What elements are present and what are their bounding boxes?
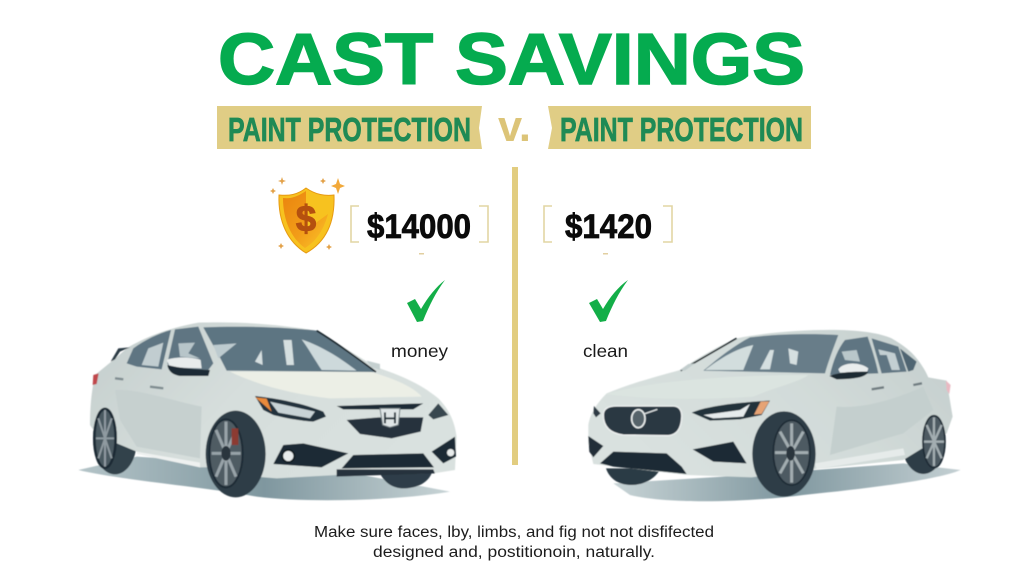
door handles (872, 383, 922, 389)
mirror base (829, 372, 868, 379)
car: left silver sedan (78, 322, 457, 500)
fog vent (273, 443, 348, 467)
rear wheel rim (94, 409, 116, 468)
icon: gold dollar shield: $ (296, 198, 316, 239)
front far tire (606, 468, 661, 485)
badge glyph (385, 412, 395, 423)
front window reflection (178, 343, 200, 358)
mirror (838, 363, 868, 373)
front spokes (212, 422, 241, 485)
mirror base (167, 365, 210, 376)
windshield pillars (255, 340, 294, 365)
icon: gold dollar shield (270, 177, 345, 253)
left headlight (593, 406, 601, 417)
banner: left paint protection (217, 106, 482, 149)
versus label: v. (498, 102, 531, 151)
lower grille (600, 452, 687, 474)
sill (815, 448, 905, 469)
mirror (167, 357, 202, 368)
center divider (512, 167, 518, 465)
fog lamp (282, 450, 294, 462)
windshield reflection right (302, 339, 357, 371)
front hub (786, 446, 795, 461)
car: right silver sedan (588, 330, 961, 501)
rear side window (872, 338, 907, 373)
lower vent (693, 442, 747, 463)
window reflection (842, 350, 860, 362)
banner: right paint protection (548, 106, 811, 149)
headlight amber (241, 397, 272, 423)
spoiler (111, 347, 130, 362)
footer caption: Make sure faces, lby, limbs, and fig not not disfifected (314, 524, 714, 541)
left vent (588, 436, 603, 457)
side sill (137, 452, 200, 467)
hood crease (337, 403, 423, 409)
grille emblem (632, 410, 645, 428)
quarter window (900, 348, 917, 372)
price: left (351, 206, 488, 254)
brake caliper (232, 428, 238, 445)
rear spokes (924, 417, 944, 466)
rear window reflection (142, 343, 163, 367)
windshield lower edge (317, 331, 376, 372)
upper grille (347, 417, 423, 438)
front far tire (380, 473, 432, 488)
windshield reflection left (213, 343, 237, 358)
headlight (692, 401, 770, 421)
windshield (703, 334, 838, 373)
rear tire (93, 409, 137, 474)
windshield (203, 327, 376, 372)
hub (221, 446, 231, 461)
windshield edge (681, 338, 737, 371)
front rim (209, 419, 243, 487)
ground shadow (613, 463, 961, 501)
rear tire (902, 409, 945, 474)
headlight amber (754, 401, 776, 446)
front side window (830, 337, 878, 375)
title: CAST SAVINGS (218, 20, 805, 100)
taillight (946, 381, 951, 394)
windshield reflection (705, 345, 753, 370)
windshield pillars (760, 348, 798, 369)
body shell (90, 322, 457, 478)
ground shadow (78, 457, 450, 500)
right fog vent (432, 437, 456, 463)
rear side window (127, 330, 171, 369)
footer caption (314, 524, 714, 561)
banner: left paint protection: PAINT PROTECTION (228, 111, 471, 148)
front splitter (337, 469, 435, 477)
front side window (167, 327, 213, 370)
price: left: $14000 (367, 208, 471, 246)
rear wheel spokes (96, 410, 114, 467)
front rim (773, 420, 810, 485)
front tire (752, 411, 816, 497)
side panel shadow (830, 387, 933, 455)
banner: right paint protection: PAINT PROTECTION (560, 111, 803, 148)
body shell (588, 330, 953, 477)
emblem diagonal (644, 409, 657, 414)
right fog lamp (447, 449, 454, 456)
hood crease (607, 375, 808, 399)
price: right (544, 206, 672, 254)
front tire (206, 411, 266, 497)
footer caption: designed and, postitionoin, naturally. (373, 544, 655, 561)
hood highlight (230, 372, 422, 398)
right mirror (367, 361, 380, 370)
headlight lens (270, 402, 315, 418)
side panel shadow (115, 390, 202, 458)
grille (603, 406, 682, 436)
headlight (255, 396, 326, 422)
rear reflection (878, 349, 900, 370)
headlight lens (703, 404, 750, 418)
label: clean: clean (583, 341, 628, 361)
icon: right check mark (589, 280, 628, 322)
taillight (93, 373, 99, 385)
lower grille (342, 453, 434, 468)
rear rim (923, 416, 945, 468)
badge (380, 408, 400, 427)
right headlight (428, 403, 448, 419)
label: money: money (391, 341, 448, 361)
icon: left check mark (407, 280, 445, 322)
door handles (115, 378, 163, 388)
front spokes (775, 423, 808, 483)
price: right: $1420 (565, 208, 652, 246)
left mirror (680, 363, 695, 371)
